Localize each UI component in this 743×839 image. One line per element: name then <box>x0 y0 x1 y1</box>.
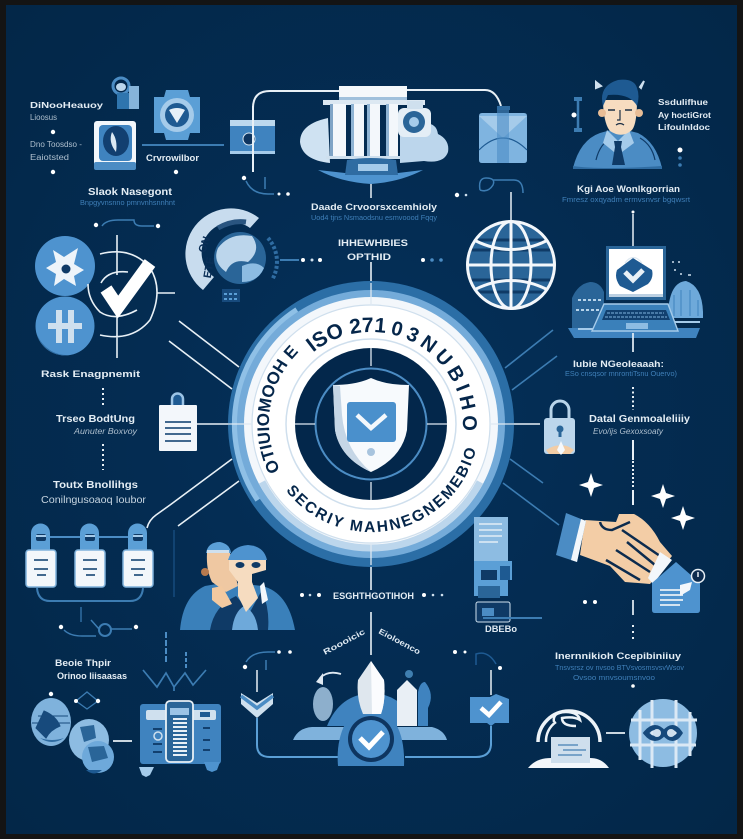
body <box>573 128 662 168</box>
hands <box>580 514 672 584</box>
seal curved title: left: OTIUIOMOOH E <box>257 344 298 473</box>
label: Ihhewhbies Opthid: IHHEWHBIES <box>338 238 408 248</box>
left server <box>572 282 604 328</box>
icon: padlock tag <box>113 78 139 109</box>
connector: data center to envelope tile <box>407 90 501 106</box>
icon: diamond connector <box>49 692 100 709</box>
left column labels: Conilngusoaoq Ioubor <box>41 495 147 506</box>
camera <box>398 108 431 137</box>
icon: earth with ring badge: ON <box>196 235 213 255</box>
padlock 3 <box>123 524 153 587</box>
left column labels: Toutx Bnollihgs <box>53 480 138 491</box>
icon: crosshair check <box>88 235 175 358</box>
top-left labels: Eaiotsted <box>30 153 69 162</box>
label: Inernnikioh Ccepibiniiuy <box>555 651 684 688</box>
label: Daade Crvoorsxcemhioly: Uod4 tjns Nsmaodsnu esmvoood Fqqy <box>311 213 437 222</box>
padlock 1 <box>26 524 56 587</box>
label: Inernnikioh Ccepibiniiuy: Inernnikioh Ccepibiniiuy <box>555 651 682 662</box>
columns <box>323 100 425 159</box>
icon: hash circle <box>36 296 94 356</box>
icon: shield <box>333 378 409 472</box>
label: Iubie NGeoIeaaah <box>565 359 677 410</box>
icon: clipboard <box>159 394 197 451</box>
icon: laptop with shield <box>568 246 703 338</box>
wings <box>293 727 447 740</box>
keyboard <box>592 304 678 331</box>
globe <box>214 232 266 284</box>
base platform <box>318 170 423 184</box>
hair <box>602 80 638 106</box>
bottom center label row: ESGHTHGOTIHOH <box>333 591 414 601</box>
shield badge <box>616 258 652 292</box>
jackets <box>180 582 295 630</box>
radiating connector lines <box>147 262 559 655</box>
left head <box>207 553 238 592</box>
seal curved title: bottom: SECRIY MAHNEGNEMEBIO <box>288 448 475 532</box>
icon: crystal summit with badge <box>293 627 447 766</box>
hand <box>212 586 232 608</box>
label: Kgi Aoe Wonlkgorrian <box>562 184 691 214</box>
label: Crvrowilbor: Crvrowilbor <box>146 153 200 163</box>
connector to compliance label <box>583 600 633 642</box>
left cloud <box>300 118 330 163</box>
label: Ihhewhbies Opthid <box>338 238 408 262</box>
right check connector <box>405 650 509 757</box>
curved captions: Eioloenco <box>377 627 422 656</box>
icon: earth with ring badge <box>185 208 277 302</box>
icon: data center with cloud <box>300 86 448 184</box>
icon: badge tile <box>94 121 136 170</box>
left column labels: Rask Enagpnemit <box>41 369 141 380</box>
right figures <box>397 670 431 726</box>
label: Kgi Aoe Wonlkgorrian: Kgi Aoe Wonlkgorrian <box>577 184 680 194</box>
central ISO 27001 seal <box>228 281 514 567</box>
top-left labels: Dno Toosdso - <box>30 140 82 149</box>
label: Inernnikioh Ccepibiniiuy: Tnsvsrsz ov nvsoo BTVsvosmsvsvWsov <box>555 663 684 672</box>
connector loop above globe <box>455 178 523 222</box>
small connector above risk icons <box>94 220 160 228</box>
seal rings <box>228 281 514 567</box>
monitor <box>606 246 666 300</box>
curved captions <box>322 627 422 657</box>
label: Datal Genmoaleliiiy <box>589 414 690 505</box>
dotted connector left of data center <box>242 176 290 196</box>
bottom center label row <box>300 591 443 601</box>
right cloud <box>400 124 448 163</box>
connector below padlocks <box>59 607 138 636</box>
icon: wireframe globe <box>468 221 554 309</box>
curved captions: Roooicic <box>322 627 367 657</box>
crystal <box>358 661 385 714</box>
icon: three padlocks <box>26 524 153 601</box>
icon: padlock right <box>544 401 575 455</box>
label: person notes: Ssdulifhue <box>658 97 708 107</box>
left column labels: Trseo BodtUng <box>56 414 135 425</box>
label: person notes: Ay hoctiGrot <box>658 110 711 120</box>
left column labels: Aunuter Boxvoy <box>73 427 138 436</box>
label: Slaok Nasegont: Slaok Nasegont <box>88 187 173 198</box>
icon: device with phone <box>139 701 221 777</box>
icon: browser card <box>230 106 275 172</box>
icon: envelope with clock <box>652 562 704 613</box>
seal curved title: right: 03NUBIHO <box>392 322 477 430</box>
connector: data center to card <box>253 91 340 172</box>
label: Daade Crvoorsxcemhioly: Daade Crvoorsxcemhioly <box>311 202 438 213</box>
icon: document blueprint <box>474 517 542 634</box>
left column labels <box>41 369 147 506</box>
label: Daade Crvoorsxcemhioly <box>311 184 438 222</box>
icon: handshake <box>556 473 695 584</box>
padlock 2 <box>75 524 105 587</box>
label: Inernnikioh Ccepibiniiuy: Ovsoo mnvsoumsnvoo <box>573 673 655 682</box>
icon: octagon emblem <box>154 90 200 140</box>
label: Beoie Thpir <box>55 658 127 681</box>
left chevron connector <box>241 650 340 757</box>
platform <box>568 328 700 338</box>
label: person notes: LifouInIdoc <box>658 122 710 132</box>
label: Slaok Nasegont <box>80 187 176 207</box>
icon: risk star circle <box>35 236 95 296</box>
icon: document blueprint: DBEBo <box>485 624 518 634</box>
roof beam <box>339 86 407 100</box>
label: Slaok Nasegont: Bnpgyvnsnno pmnvnhsnnhnt <box>80 198 176 207</box>
icon: earth with ring badge: ETE <box>202 256 217 279</box>
ring badge <box>185 208 259 290</box>
icon: globes <box>31 698 114 774</box>
icon: network zigzag <box>143 632 206 691</box>
icon: infinity grid circle <box>629 699 697 768</box>
top-left labels: Lioosus <box>30 113 57 122</box>
check badge <box>338 718 404 766</box>
label: person notes <box>658 97 711 167</box>
dots right of earth <box>280 258 443 262</box>
top-left labels <box>30 100 103 174</box>
label: Datal Genmoaleliiiy: Evo/ijs Gexoxsoaty <box>593 427 664 436</box>
label: Iubie NGeoIeaaah: Iubie NGeoIeaaah: <box>573 359 664 369</box>
right head <box>229 560 266 612</box>
side arrow and figure <box>320 673 341 678</box>
icon: envelope tile <box>479 106 527 163</box>
label: Iubie NGeoIeaaah: ESo cnsqsor mnrontiTsnu Ouervo) <box>565 369 677 378</box>
seal curved title: ISO 271: ISO 271 <box>305 318 386 352</box>
head <box>603 100 637 135</box>
label: Kgi Aoe Wonlkgorrian: Fmresz oxqyadm ermvsnvsr bgqwsrt <box>562 195 691 204</box>
label: Beoie Thpir: Orinoo liisaasas <box>57 671 127 681</box>
icon: two security officers <box>180 542 295 630</box>
label: Ihhewhbies Opthid: OPTHID <box>347 252 392 262</box>
top-left labels: DiNooHeauoy <box>30 100 103 110</box>
icon: signal arches with document <box>528 711 609 768</box>
dome <box>327 693 417 726</box>
right dome <box>668 281 703 318</box>
icon: person in suit <box>572 80 662 169</box>
label: Datal Genmoaleliiiy: Datal Genmoaleliiiy <box>589 414 690 425</box>
left cuff <box>556 513 586 562</box>
sparkles <box>579 473 695 530</box>
right cuff <box>648 552 672 584</box>
label: Crvrowilbor <box>142 145 224 174</box>
label: Beoie Thpir: Beoie Thpir <box>55 658 112 668</box>
